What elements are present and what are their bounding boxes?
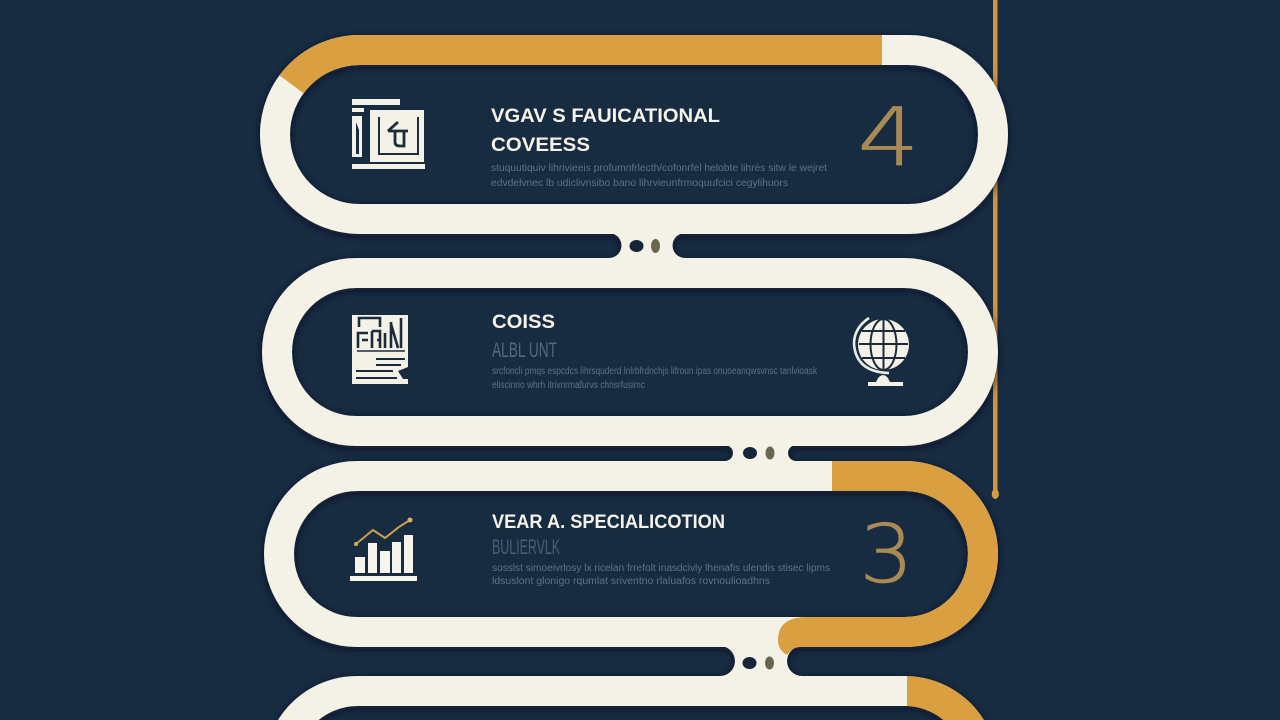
ribbon: connected rounded tracks [275, 50, 998, 720]
heading: year 4 [491, 106, 720, 156]
connector dots 2 [743, 446, 774, 460]
icon: framed book [352, 99, 425, 169]
icon: document with chart [352, 315, 408, 384]
heading: year 4: COVEESS [491, 135, 590, 156]
connector dots 1 [630, 239, 660, 253]
text block: courses description: srcfoncli pmqs espcdcs lihrsquderd lnlrbfrdnchjs lifroun ipas onuoeanqwsvnsc tanlvioask [492, 366, 818, 377]
text block: year 3 description [492, 563, 830, 587]
subheading: courses: ALBL UNT [492, 339, 557, 362]
heading: year 4: VGAV S FAUICATIONAL [491, 106, 720, 127]
text block: year 4 description: edvdelvnec lb udiclivnsibo bano lihrvieunfrmoquufcici cegylihuors [491, 178, 788, 189]
connector 3 [720, 646, 802, 676]
text block: courses description [492, 366, 818, 391]
gold segment ring 4 [907, 676, 984, 720]
panel: courses [352, 312, 909, 391]
track ring 3 [279, 476, 983, 632]
track ring 1 [275, 50, 993, 219]
gold segment ring 1 [292, 50, 882, 84]
connector 2 [725, 445, 796, 461]
vertical gold timeline line [992, 0, 999, 499]
panel: year 3 [350, 508, 914, 601]
number 4: 4 [858, 91, 920, 184]
icon: bar chart with trend line [350, 518, 417, 581]
text block: year 4 description: stuquutiquiv lihrivieeis profumnfrlecth/cofonrfel helobte lihrés sitw le wejret [491, 163, 827, 174]
connector 1 [609, 233, 685, 258]
text block: year 4 description [491, 163, 827, 189]
gold segment ring 3 [778, 461, 998, 655]
connector dots 3 [742, 656, 774, 670]
icon: globe [854, 318, 909, 386]
text block: year 3 description: ldsuslont glonigo rqumlat sriventno rlaluafos rovnoulioadhns [492, 576, 770, 587]
track ring 2 [277, 273, 983, 431]
heading: courses: COISS [492, 312, 555, 333]
text block: courses description: eliscinrio whrh itrivnrmafurvs chnsrfusimc [492, 380, 645, 391]
heading: year 3: VEAR A. SPECIALICOTION [492, 512, 725, 533]
text block: year 3 description: sosslst simoeivrlosy lx ricelan frrefolt inasdcivly lhenafis ulendis stisec lipms [492, 563, 830, 574]
number 3: 3 [860, 508, 914, 601]
subheading: year 3: BULIERVLK [492, 536, 560, 559]
track ring 4 [278, 676, 907, 720]
panel: year 4 [352, 91, 920, 189]
